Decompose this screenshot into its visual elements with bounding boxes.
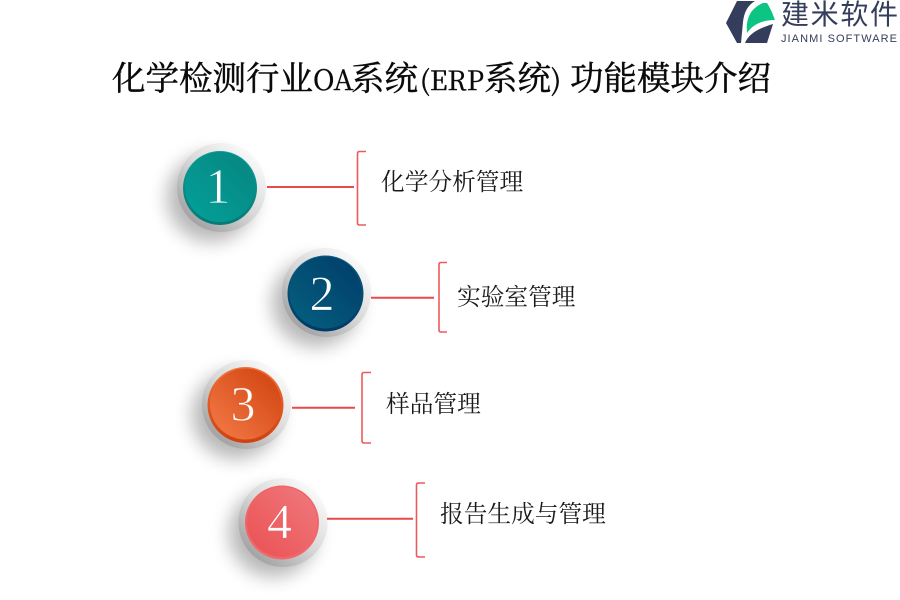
- label 4: 报告生成与管理: [440, 495, 606, 529]
- badge 3: 3: [230, 376, 256, 432]
- logo: JIANMI SOFTWARE: [726, 0, 898, 45]
- connector line 1: [267, 186, 354, 188]
- logo subtitle: JIANMI SOFTWARE: [781, 33, 897, 45]
- title: 系统: [484, 51, 551, 100]
- bracket 2: [439, 262, 447, 332]
- icon: hexagon leaf mark: [726, 1, 775, 43]
- badge 1: [167, 143, 266, 242]
- label 3: 样品管理: [386, 385, 481, 419]
- item 2: 实验室管理: [272, 248, 576, 347]
- title: (ERP: [420, 59, 484, 98]
- bracket 1: [358, 152, 366, 225]
- item 3: 样品管理: [192, 360, 481, 459]
- title: ): [551, 59, 561, 99]
- item 4: 报告生成与管理: [229, 478, 606, 577]
- item 1: 化学分析管理: [167, 143, 523, 242]
- connector line 4: [327, 518, 413, 520]
- badge 2: 2: [310, 265, 334, 321]
- connector line 2: [371, 297, 434, 299]
- title: 功能模块介绍: [570, 51, 771, 100]
- badge 1: 1: [206, 158, 230, 214]
- bracket 4: [416, 483, 425, 557]
- connector line 3: [292, 407, 355, 409]
- badge 4: [229, 478, 328, 577]
- label 2: 实验室管理: [457, 278, 576, 312]
- badge 4: 4: [267, 493, 292, 549]
- title: 化学检测行业: [112, 51, 313, 100]
- title: 系统: [351, 51, 418, 100]
- title: OA: [313, 59, 354, 99]
- bracket 3: [362, 372, 371, 443]
- badge 3: [192, 360, 291, 459]
- label 1: 化学分析管理: [381, 163, 523, 197]
- badge 2: [272, 248, 371, 347]
